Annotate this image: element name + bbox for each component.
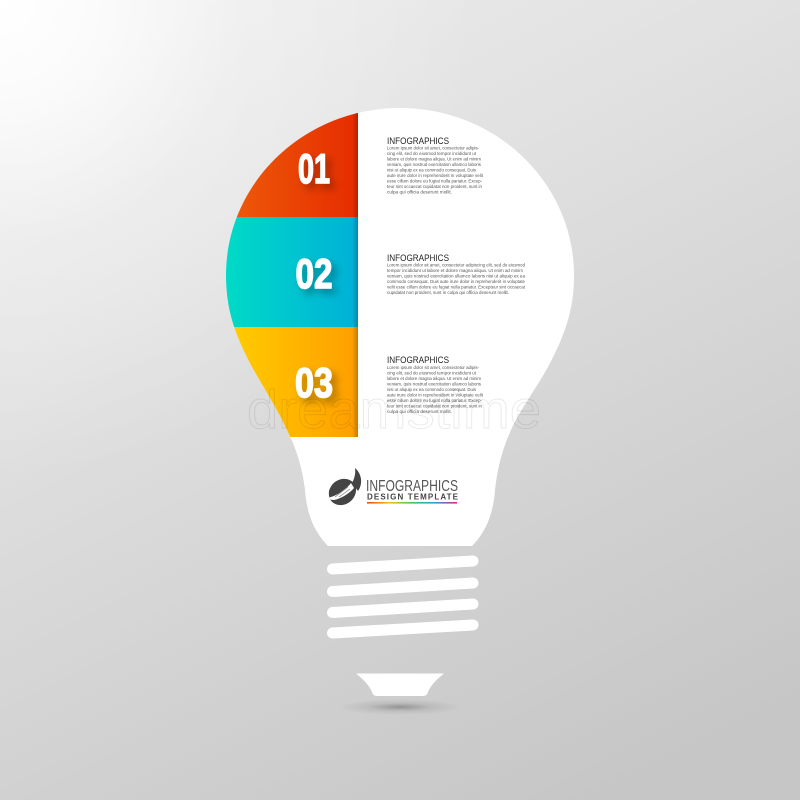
text block 3 xyxy=(387,355,484,414)
text block 3: INFOGRAPHICS xyxy=(387,355,449,365)
watermark: dreamstime xyxy=(247,380,541,440)
text block 3: veniam, quis nostrud exercitation ullamco laboris xyxy=(387,382,482,386)
text block 2: INFOGRAPHICS xyxy=(387,253,449,263)
panel: coloured bands xyxy=(220,100,358,437)
text block 3: aute irure dolor in reprehenderit in voluptate velit xyxy=(387,392,484,398)
text block 1: cing elit, sed do eiusmod tempor incididunt ut xyxy=(387,151,477,156)
text block 2: Lorem ipsum dolor sit amet, consectetur adipiscing elit, sed do eiusmod xyxy=(387,262,525,268)
text block 1: aute irure dolor in reprehenderit in voluptate velit xyxy=(387,173,484,178)
bulb glass xyxy=(226,108,574,546)
text block 3: nisi ut aliquip ex ea commodo consequat. Duis xyxy=(387,387,477,392)
band 01 red xyxy=(236,112,358,217)
logo title: INFOGRAPHICS xyxy=(366,478,458,495)
text block 2 xyxy=(387,253,526,295)
text block 2: velit esse cillum dolore eu fugiat nulla pariatur. Excepteur sint occaecat xyxy=(387,284,526,290)
text block 3: esse cillum dolore eu fugiat nulla pariatur. Excep- xyxy=(387,398,482,403)
text block 3: cing elit, sed do eiusmod tempor incididunt ut xyxy=(387,370,477,376)
logo xyxy=(327,468,459,505)
text block 1: labore et dolore magna aliqua. Ut enim ad minim xyxy=(387,156,481,162)
text block 1: veniam, quis nostrud exercitation ullamco laboris xyxy=(387,162,482,167)
number 01: 01 xyxy=(298,145,330,192)
number 02: 02 xyxy=(296,250,332,297)
text block 1: esse cillum dolore eu fugiat nulla pariatur. Excep- xyxy=(387,178,482,184)
text block 3: labore et dolore magna aliqua. Ut enim ad minim xyxy=(387,376,481,381)
text block 1: culpa qui officia deserunt mollit. xyxy=(387,190,452,194)
bulb contact tip xyxy=(356,674,444,696)
text block 3: Lorem ipsum dolor sit amet, consectetur adipis- xyxy=(387,365,479,370)
ground shadow xyxy=(338,699,462,715)
rainbow rule xyxy=(367,502,457,504)
band 03 orange xyxy=(234,327,358,437)
text block 2: commodo consequat. Duis aute irure dolor in reprehenderit in voluptate xyxy=(387,279,525,284)
logo subtitle: DESIGN TEMPLATE xyxy=(367,492,459,502)
text block 1: INFOGRAPHICS xyxy=(387,136,449,146)
text block 2: cupidatat non proident, sunt in culpa qui officia deserunt mollit. xyxy=(387,290,509,295)
text block 1: Lorem ipsum dolor sit amet, consectetur adipis- xyxy=(387,146,479,150)
text block 2: veniam, quis nostrud exercitation ullamco laboris nisi ut aliquip ex ea xyxy=(387,274,525,278)
text block 1: nisi ut aliquip ex ea commodo consequat. Duis xyxy=(387,168,477,172)
number 03: 03 xyxy=(295,359,333,406)
text block 1 xyxy=(387,136,484,194)
text block 1: teur sint occaecat cupidatat non proident, sunt in xyxy=(387,184,482,189)
screw thread bars xyxy=(332,561,473,633)
band right-edge shading xyxy=(353,113,358,437)
band 02 teal xyxy=(220,217,358,327)
text block 3: teur sint occaecat cupidatat non proident, sunt in xyxy=(387,404,482,408)
text block 3: culpa qui officia deserunt mollit. xyxy=(387,409,452,414)
icon: leaf swirl xyxy=(327,468,361,505)
text block 2: tempor incididunt ut labore et dolore magna aliqua. Ut enim ad minim xyxy=(387,268,523,273)
